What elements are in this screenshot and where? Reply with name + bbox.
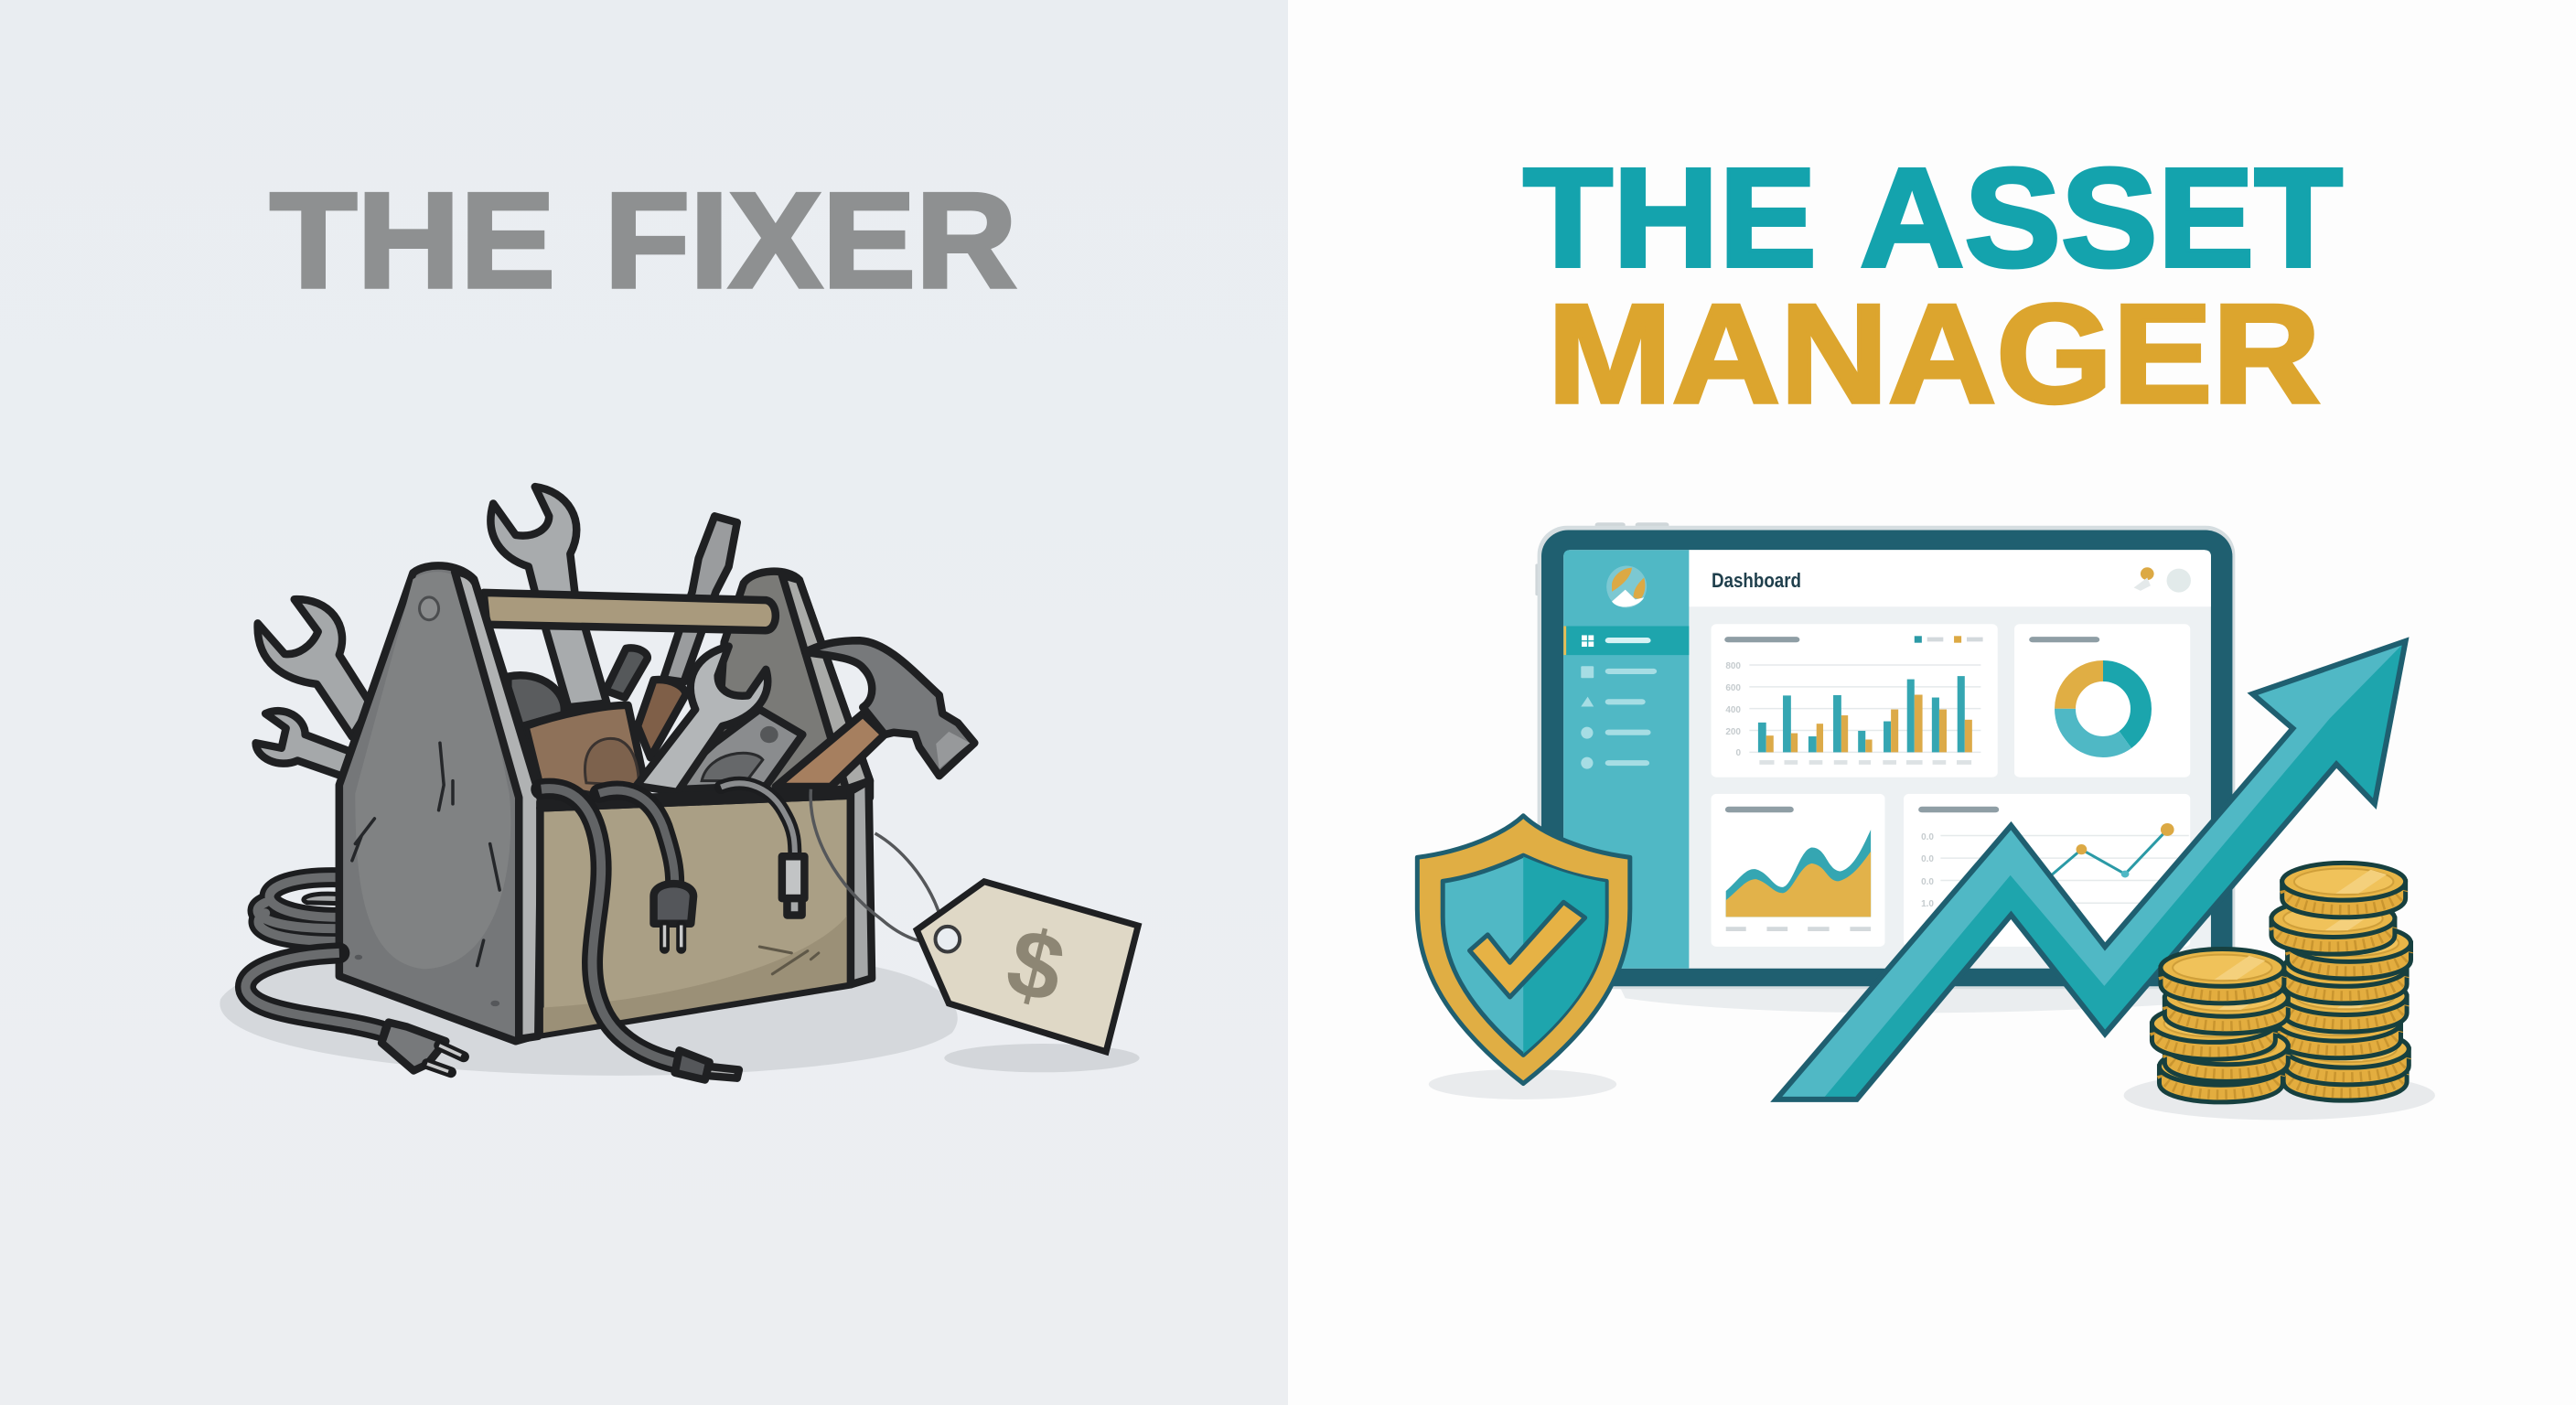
shield with check xyxy=(1417,816,1630,1084)
line chart axis labels: 1.0 xyxy=(1921,899,1934,909)
center wrench xyxy=(490,487,606,707)
grey plate tool xyxy=(663,710,802,790)
title: the fixer: FIXER xyxy=(605,166,1017,316)
coin shadow xyxy=(2124,1071,2435,1120)
tablet screen xyxy=(1563,550,2211,969)
price tag xyxy=(917,882,1138,1052)
growth arrow xyxy=(1776,641,2406,1099)
hammer xyxy=(776,640,974,787)
panel: right background xyxy=(1288,0,2576,1405)
dashboard heading: Dashboard xyxy=(1712,569,1801,592)
large wrench, left xyxy=(258,599,371,736)
title: the fixer xyxy=(270,166,1017,316)
gold bars xyxy=(1766,695,1972,752)
bar chart axis labels xyxy=(1725,661,1741,758)
cable with plug, centre xyxy=(599,790,693,949)
illustration: dashboard, arrow, shield and coins xyxy=(1417,522,2435,1120)
sidebar items xyxy=(1581,666,1657,769)
front wrench xyxy=(637,647,767,792)
panel: left background xyxy=(0,0,1288,1405)
small wrench, left xyxy=(256,711,355,778)
card: line chart xyxy=(1904,794,2190,947)
carry bar xyxy=(484,593,776,630)
bar chart axis labels: 800 xyxy=(1725,661,1741,671)
coin stack, left xyxy=(2152,949,2288,1102)
dark tool handle xyxy=(606,648,648,698)
card: donut chart xyxy=(2014,624,2190,778)
wooden mallet xyxy=(525,705,645,796)
card: area chart xyxy=(1712,794,1885,947)
chart legend xyxy=(1915,636,1983,643)
front panel xyxy=(540,781,872,1035)
screwdriver xyxy=(663,516,737,682)
line chart axis labels: 0.0 xyxy=(1921,877,1934,887)
coiled cable xyxy=(258,877,339,941)
tablet shadow xyxy=(1618,984,2202,1013)
title line: the asset: ASSET xyxy=(1860,139,2343,296)
header user icons xyxy=(2134,567,2191,593)
title: the asset manager xyxy=(1523,139,2343,433)
title line: the asset: THE xyxy=(1523,139,1817,296)
dark round tool xyxy=(508,675,564,730)
bar chart axis labels: 0 xyxy=(1735,748,1741,758)
brown handle xyxy=(638,680,686,757)
ground shadow xyxy=(220,960,958,1076)
bar chart axis labels: 400 xyxy=(1725,705,1741,715)
title: the fixer: THE xyxy=(270,166,555,316)
line chart axis labels xyxy=(1921,832,1934,909)
teal bars xyxy=(1758,676,1965,752)
price tag dollar sign: $ xyxy=(997,908,1074,1024)
sidebar logo xyxy=(1606,566,1647,608)
tablet body xyxy=(1535,522,2235,989)
tag string xyxy=(810,789,946,943)
tag shadow xyxy=(944,1044,1140,1072)
sidebar active item xyxy=(1563,626,1689,655)
coin stack, right xyxy=(2271,863,2411,1100)
cable with plug, floor left xyxy=(245,953,464,1072)
usb cable xyxy=(721,783,804,916)
bar chart axis labels: 200 xyxy=(1725,727,1741,737)
title line: the asset xyxy=(1523,139,2343,296)
shield shadow xyxy=(1429,1069,1616,1099)
title line: manager: MANAGER xyxy=(1548,275,2321,433)
line chart axis labels: 0.0 xyxy=(1921,854,1934,864)
back panel xyxy=(714,572,870,798)
line chart axis labels: 0.0 xyxy=(1921,832,1934,842)
card: bar chart xyxy=(1712,624,1998,778)
dashboard header xyxy=(1689,550,2211,606)
cable with plug, front left xyxy=(542,788,739,1080)
sidebar xyxy=(1563,550,1689,969)
illustration: toolbox xyxy=(220,487,1140,1080)
left end panel xyxy=(339,565,542,1041)
donut chart xyxy=(2066,671,2141,746)
bar chart axis labels: 600 xyxy=(1725,683,1741,693)
